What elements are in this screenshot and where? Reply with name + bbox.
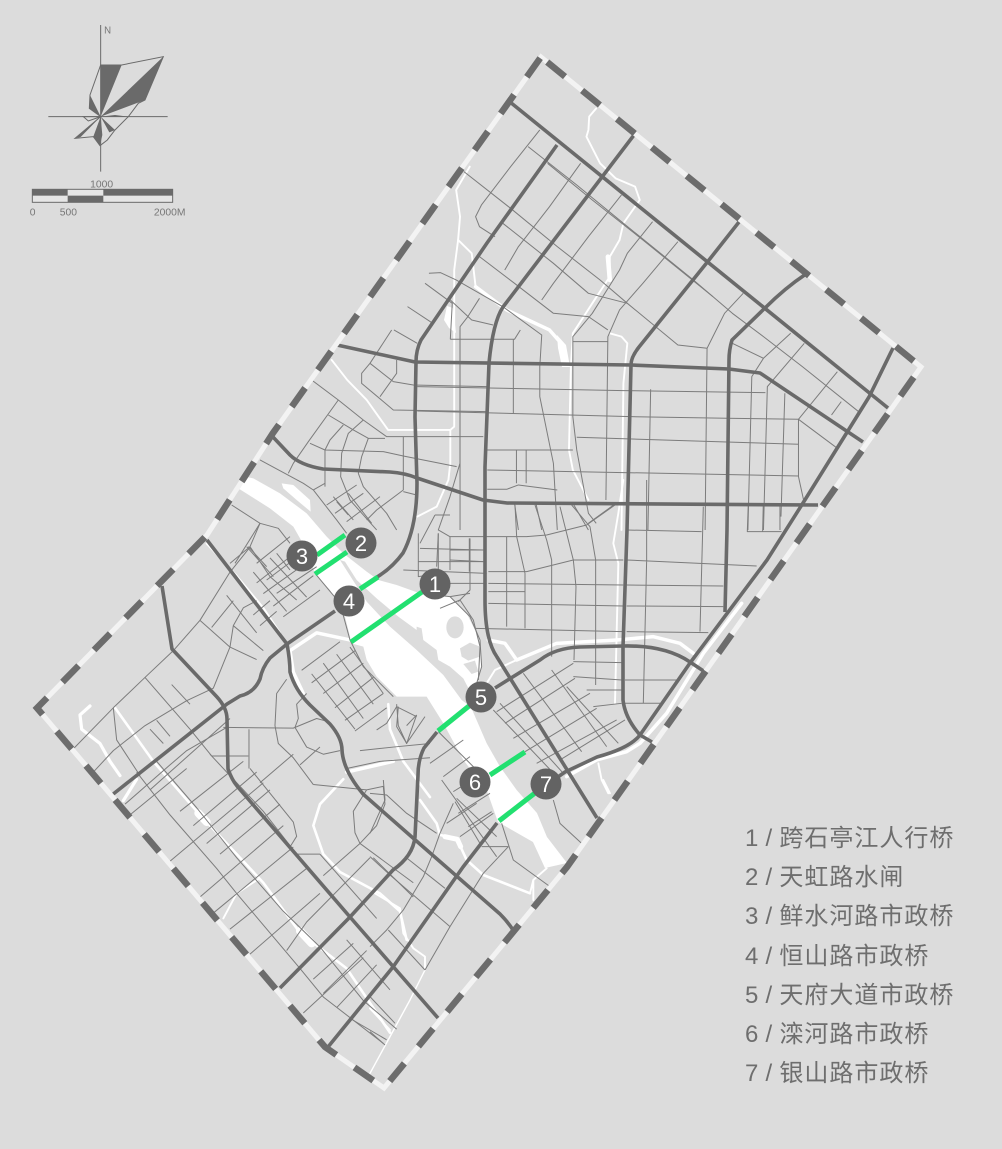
- minor roads: north sector: [394, 130, 861, 530]
- legend: 1 / 跨石亭江人行桥: [745, 825, 954, 852]
- minor roads: north-west sector: [232, 330, 487, 570]
- creeks: [80, 108, 742, 1073]
- scale bar: [30, 179, 185, 219]
- scale bar: 500: [60, 208, 77, 219]
- scale bar: 0: [30, 208, 36, 219]
- numbered markers: 2: [355, 531, 367, 556]
- numbered markers: 5: [475, 685, 487, 710]
- numbered markers: [286, 528, 562, 800]
- minor roads: south-west sector: [73, 547, 430, 1043]
- numbered markers: 6: [469, 770, 481, 795]
- minor roads: [73, 130, 861, 1045]
- minor roads: around bridges: [230, 523, 497, 837]
- numbered markers: 4: [343, 589, 355, 614]
- legend: 2 / 天虹路水闸: [745, 864, 904, 891]
- boundary: [37, 57, 921, 1088]
- legend: 3 / 鲜水河路市政桥: [745, 903, 954, 930]
- icon: wind rose compass: N: [104, 26, 111, 37]
- legend: 7 / 银山路市政桥: [745, 1060, 929, 1087]
- numbered markers: 1: [429, 572, 441, 597]
- numbered markers: 7: [540, 772, 552, 797]
- legend: [745, 825, 954, 1087]
- minor roads: south sector: [370, 780, 582, 1045]
- scale bar: 2000M: [154, 208, 185, 219]
- icon: wind rose compass: [48, 25, 168, 172]
- bridges: [315, 535, 535, 821]
- major roads: [112, 102, 893, 1047]
- legend: 4 / 恒山路市政桥: [745, 943, 929, 970]
- minor roads: central and east sector: [440, 480, 782, 780]
- legend: 5 / 天府大道市政桥: [745, 982, 954, 1009]
- legend: 6 / 滦河路市政桥: [745, 1021, 929, 1048]
- numbered markers: 3: [296, 544, 308, 569]
- scale bar: 1000: [90, 179, 113, 190]
- river islands: [340, 560, 480, 705]
- river: [238, 477, 567, 868]
